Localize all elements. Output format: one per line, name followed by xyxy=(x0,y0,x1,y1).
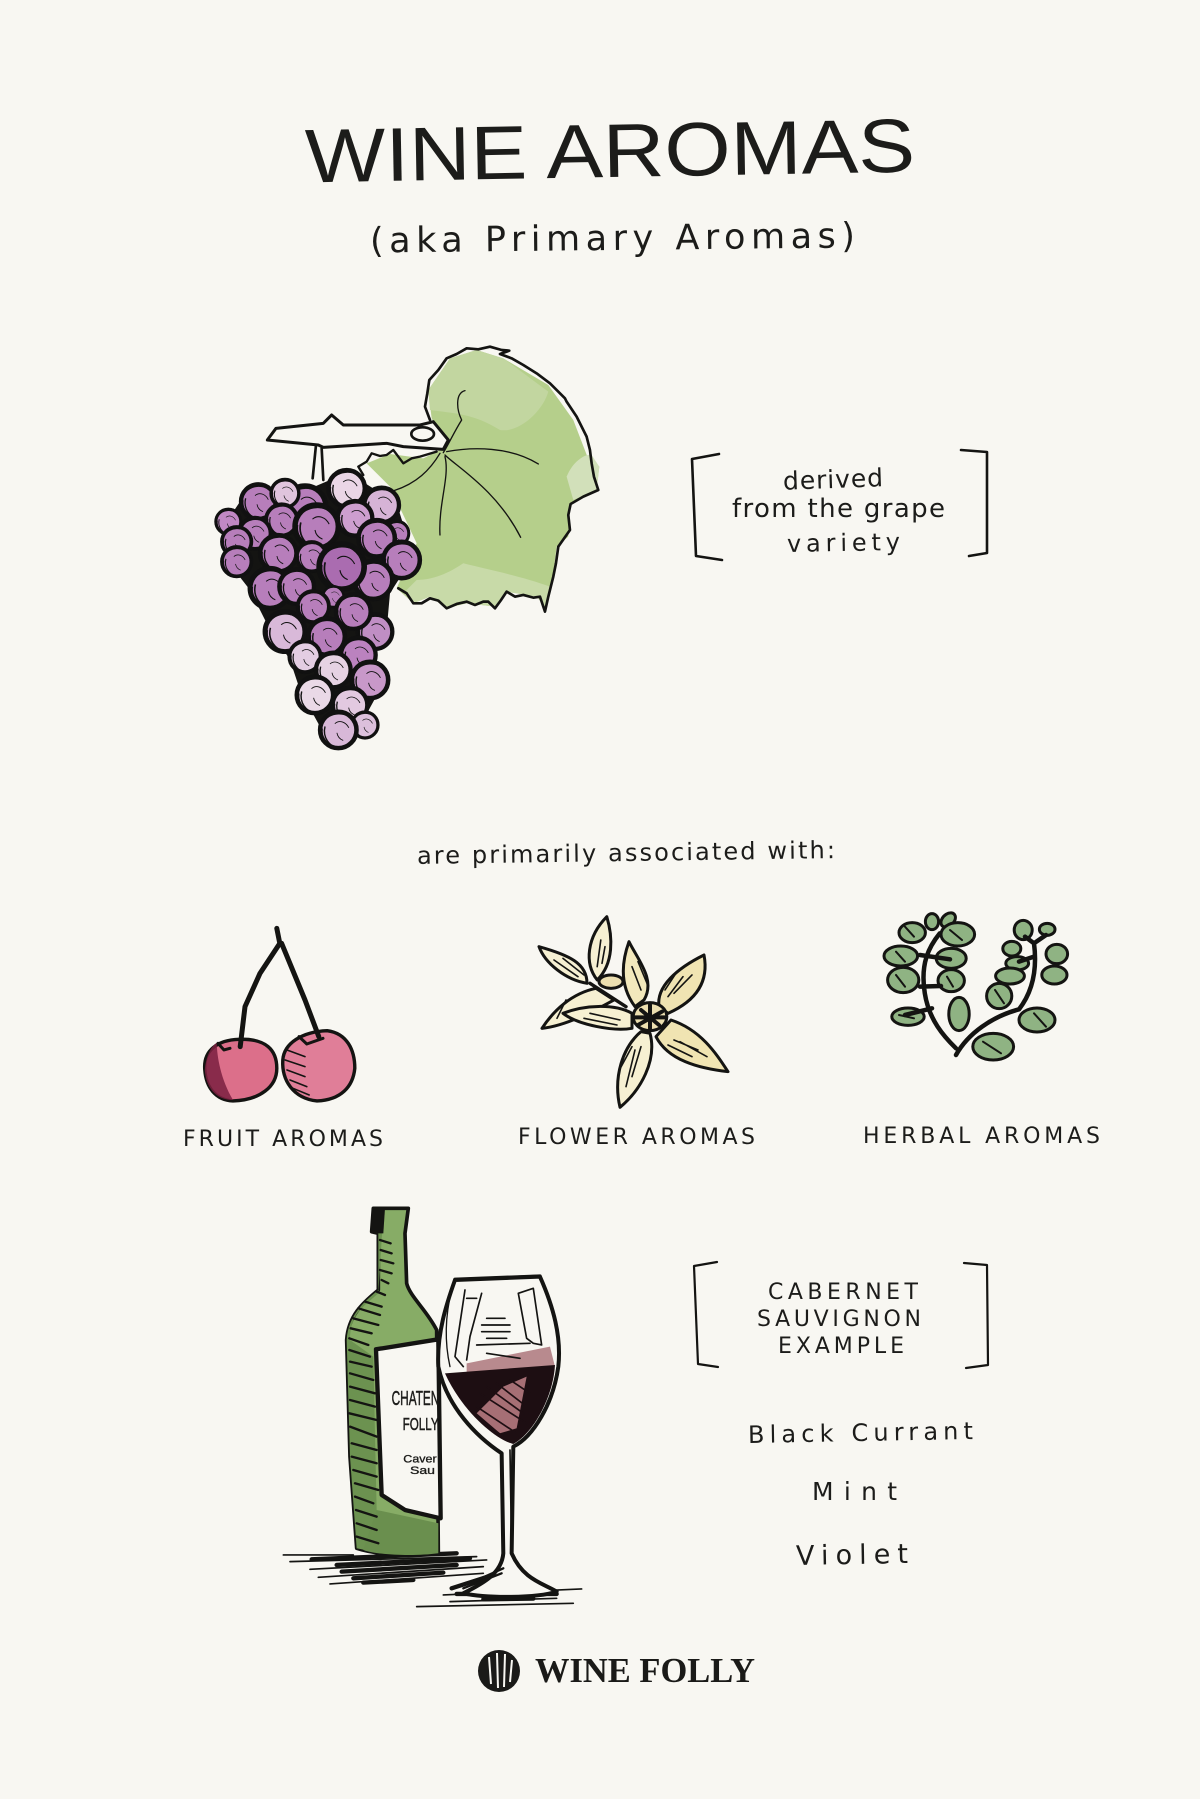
glass highlights xyxy=(455,1276,540,1279)
label: flower aromas: FLOWER AROMAS xyxy=(518,1125,755,1150)
illustration: grape cluster and leaf xyxy=(216,347,599,748)
bottle body xyxy=(347,1208,438,1555)
bottle label xyxy=(376,1339,441,1518)
right bracket xyxy=(964,1263,988,1368)
label: fruit aromas: FRUIT AROMAS xyxy=(183,1127,383,1152)
subtitle: (aka Primary Aromas) xyxy=(370,216,855,262)
leaf wash xyxy=(367,350,599,608)
icon: cherries xyxy=(205,928,355,1101)
grape cluster backing xyxy=(223,480,413,743)
vine stem xyxy=(267,415,448,449)
left bracket xyxy=(694,1262,718,1367)
callout: derived from the grape variety: variety xyxy=(787,528,900,558)
callout text: CABERNET xyxy=(768,1280,919,1305)
wine glass xyxy=(438,1277,559,1597)
callout: cabernet sauvignon example: EXAMPLE xyxy=(778,1334,904,1359)
bottle hatching xyxy=(349,1240,393,1543)
aroma list: black currant, mint, violet: Violet xyxy=(796,1539,908,1572)
label text: CHATEN xyxy=(392,1388,439,1410)
leaf veins xyxy=(394,391,538,537)
logo mark xyxy=(478,1650,520,1692)
callout: derived from the grape variety xyxy=(692,450,987,560)
text: are primarily associated with: are primarily associated with: xyxy=(417,836,835,870)
icon: herbs xyxy=(884,912,1068,1060)
icon: flower xyxy=(539,917,728,1107)
aroma list: black currant, mint, violet xyxy=(748,1417,973,1572)
callout: cabernet sauvignon example: SAUVIGNON xyxy=(757,1307,921,1332)
label: herbal aromas: HERBAL AROMAS xyxy=(863,1124,1100,1149)
label text: Sau xyxy=(410,1465,435,1477)
logo wordmark: WINE FOLLY xyxy=(535,1651,755,1690)
aroma list: black currant, mint, violet: Black Currant xyxy=(748,1417,973,1449)
callout: derived from the grape variety: from the grape xyxy=(732,494,945,524)
callout text: derived xyxy=(783,463,883,496)
aroma list: black currant, mint, violet: Mint xyxy=(812,1477,897,1506)
right bracket xyxy=(961,450,987,556)
label text xyxy=(392,1388,439,1477)
illustration: wine bottle and glass xyxy=(283,1208,582,1607)
left bracket xyxy=(692,454,722,560)
table shadow strokes xyxy=(283,1555,582,1607)
label text: Caver xyxy=(403,1454,437,1466)
label text: FOLLY xyxy=(403,1414,439,1434)
logo: wine folly xyxy=(478,1650,755,1692)
wine fill xyxy=(467,1347,555,1373)
callout: cabernet sauvignon example xyxy=(694,1262,988,1368)
grape berries xyxy=(216,470,420,748)
leaf outline xyxy=(398,347,598,612)
title: WINE AROMAS xyxy=(304,104,916,199)
